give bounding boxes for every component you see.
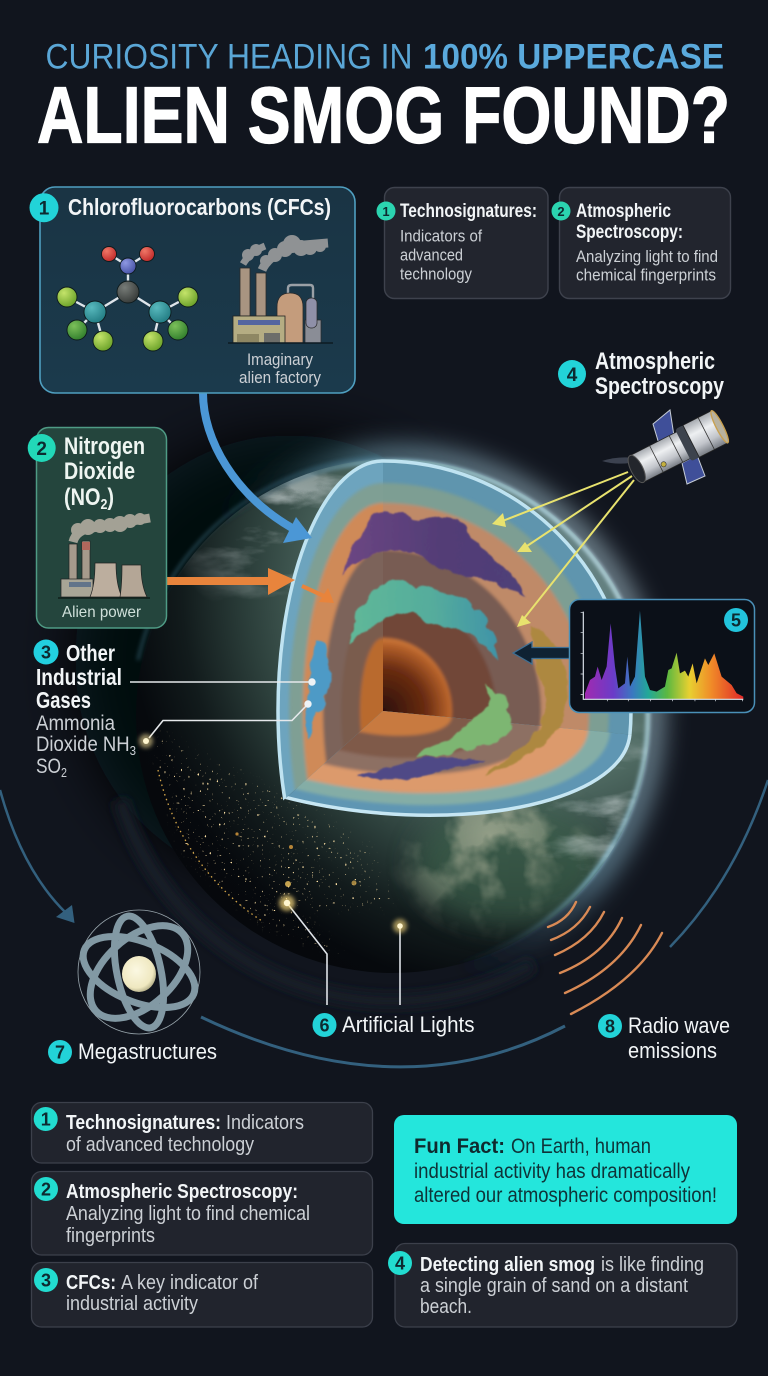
body text: Detecting alien smog bbox=[420, 1254, 595, 1276]
note text: Atmospheric bbox=[576, 201, 671, 222]
label 3: other industrial gases: Dioxide NH bbox=[36, 733, 142, 756]
callout: fun fact: On Earth, human bbox=[511, 1135, 651, 1158]
label 3: other industrial gases: 2 bbox=[61, 765, 67, 780]
gas clouds bbox=[305, 512, 567, 779]
caption: alien power: Alien power bbox=[62, 604, 142, 621]
label 3: other industrial gases: Ammonia bbox=[36, 712, 115, 735]
badge 1: 1 bbox=[39, 198, 50, 220]
factory caption: Imaginary bbox=[247, 350, 313, 369]
panel: technosignatures summary bbox=[32, 1102, 372, 1163]
factory caption bbox=[239, 350, 321, 387]
summary text: CFCs: bbox=[66, 1272, 116, 1294]
summary text bbox=[66, 1181, 310, 1247]
callout: fun fact: altered our atmospheric composition! bbox=[414, 1184, 717, 1207]
heading: NO2: Nitrogen bbox=[64, 433, 145, 460]
badge 2: 2 bbox=[557, 204, 565, 219]
label 3: other industrial gases: SO bbox=[36, 755, 66, 778]
amber gas cloud bbox=[483, 627, 567, 775]
badge 1 bbox=[376, 202, 396, 220]
icon: radio waves bbox=[548, 902, 662, 1014]
badge 2 bbox=[552, 202, 570, 220]
summary text: industrial activity bbox=[66, 1293, 198, 1315]
summary text: Technosignatures: bbox=[66, 1112, 221, 1134]
arrow: NO2 flow bbox=[167, 568, 334, 603]
label 4: atmospheric spectroscopy: Atmospheric bbox=[595, 348, 715, 375]
orbit arcs bbox=[0, 780, 768, 1067]
factory caption: alien factory bbox=[239, 368, 321, 387]
panel: spectroscopy summary bbox=[32, 1172, 372, 1255]
badge 5 bbox=[724, 608, 748, 632]
badge 2 bbox=[34, 1177, 58, 1201]
title: 100% UPPERCASE bbox=[423, 38, 724, 77]
label 4: atmospheric spectroscopy bbox=[558, 348, 725, 400]
label 3: other industrial gases: Gases bbox=[36, 687, 91, 713]
heading: NO2: 2 bbox=[100, 496, 107, 513]
summary text: Analyzing light to find chemical bbox=[66, 1203, 310, 1225]
note text: Technosignatures: bbox=[400, 201, 537, 222]
label 8: radio wave emissions bbox=[598, 1013, 730, 1063]
arrows: spectroscopy light beams bbox=[492, 472, 634, 627]
arrow: CFC flow bbox=[203, 393, 312, 543]
summary text bbox=[66, 1272, 258, 1315]
badge 3 bbox=[34, 1268, 58, 1292]
panel: technosignatures note bbox=[376, 188, 548, 298]
label 3: other industrial gases bbox=[34, 640, 136, 780]
callout: fun fact bbox=[394, 1115, 737, 1224]
panel: detecting alien smog bbox=[388, 1244, 737, 1327]
badge 1: 1 bbox=[382, 204, 390, 219]
icon: CFC molecule bbox=[57, 246, 198, 351]
panel: nitrogen dioxide bbox=[28, 428, 167, 628]
blue gas cloud bbox=[305, 640, 332, 740]
badge 1 bbox=[34, 1107, 58, 1131]
badge 4: 4 bbox=[395, 1254, 405, 1274]
green gas cloud bbox=[417, 685, 512, 757]
chart: emission spectrum bbox=[581, 611, 743, 701]
note text: technology bbox=[400, 264, 472, 284]
badge 2: 2 bbox=[36, 439, 47, 460]
panel: spectrum chart bbox=[570, 600, 754, 712]
body text: is like finding bbox=[601, 1254, 704, 1276]
summary text: A key indicator of bbox=[121, 1272, 258, 1294]
label 7: megastructures: 7 bbox=[55, 1042, 65, 1062]
panel: CFCs summary bbox=[32, 1262, 372, 1327]
title: CURIOSITY HEADING IN bbox=[46, 38, 412, 77]
note text bbox=[400, 201, 537, 284]
leader lines: other industrial gases bbox=[130, 678, 316, 748]
label 3: other industrial gases: Other bbox=[66, 640, 115, 666]
badge 1: 1 bbox=[41, 1110, 51, 1130]
badge 3: 3 bbox=[41, 642, 51, 662]
badge 3: 3 bbox=[41, 1270, 51, 1290]
note text: chemical fingerprints bbox=[576, 266, 716, 285]
note text: Analyzing light to find bbox=[576, 247, 718, 266]
label 3: other industrial gases: Industrial bbox=[36, 664, 122, 690]
body text: beach. bbox=[420, 1296, 472, 1318]
note text: Spectroscopy: bbox=[576, 222, 683, 243]
heading: NO2 bbox=[64, 433, 145, 513]
badge 5: 5 bbox=[731, 610, 741, 630]
planet cutaway cross-section bbox=[276, 459, 633, 817]
label 6: artificial lights: Artificial Lights bbox=[342, 1012, 474, 1037]
planet earth bbox=[75, 435, 660, 1001]
floor layers bbox=[285, 711, 632, 817]
body text bbox=[420, 1254, 704, 1318]
heading: NO2: Dioxide bbox=[64, 458, 135, 485]
icon: alien factory bbox=[228, 235, 333, 343]
note text bbox=[576, 201, 718, 285]
badge 1 bbox=[30, 193, 58, 222]
label 8: radio wave emissions: emissions bbox=[628, 1038, 717, 1063]
teal gas cloud bbox=[350, 580, 498, 660]
purple gas cloud bbox=[342, 512, 525, 597]
left wall layers bbox=[276, 459, 383, 800]
icon: megastructure dyson sphere bbox=[73, 908, 205, 1036]
heading: NO2: (NO bbox=[64, 484, 108, 511]
summary text: Atmospheric Spectroscopy: bbox=[66, 1181, 298, 1203]
panel: chlorofluorocarbons bbox=[30, 187, 355, 393]
badge 2 bbox=[28, 434, 56, 462]
panel: atmospheric spectroscopy note bbox=[552, 188, 730, 298]
heading: CFCs: Chlorofluorocarbons (CFCs) bbox=[68, 194, 331, 220]
heading: NO2: ) bbox=[107, 484, 114, 511]
label 4: atmospheric spectroscopy: 4 bbox=[567, 365, 578, 386]
callout: fun fact: industrial activity has dramatically bbox=[414, 1160, 690, 1183]
label 7: megastructures: Megastructures bbox=[78, 1039, 217, 1064]
label 4: atmospheric spectroscopy: Spectroscopy bbox=[595, 373, 725, 400]
label 8: radio wave emissions: 8 bbox=[605, 1016, 615, 1036]
right wall layers bbox=[383, 459, 633, 735]
icon: space telescope bbox=[602, 409, 731, 488]
badge 4 bbox=[388, 1251, 412, 1275]
summary text: Indicators bbox=[226, 1112, 304, 1134]
summary text: fingerprints bbox=[66, 1225, 155, 1247]
label 3: other industrial gases: 3 bbox=[130, 743, 136, 758]
summary text bbox=[66, 1112, 304, 1156]
callout: fun fact: Fun Fact: bbox=[414, 1135, 505, 1158]
leader lines: artificial lights bbox=[279, 895, 407, 1005]
body text: a single grain of sand on a distant bbox=[420, 1275, 688, 1297]
label 6: artificial lights: 6 bbox=[319, 1016, 330, 1036]
badge 2: 2 bbox=[41, 1180, 51, 1200]
summary text: of advanced technology bbox=[66, 1134, 254, 1156]
violet gas cloud bbox=[357, 757, 487, 779]
note text: advanced bbox=[400, 246, 463, 265]
label 8: radio wave emissions: Radio wave bbox=[628, 1013, 730, 1038]
note text: Indicators of bbox=[400, 227, 482, 246]
badge 3 bbox=[34, 640, 58, 664]
icon: power plant bbox=[58, 513, 150, 598]
arrow: spectrum pointer bbox=[513, 642, 571, 664]
